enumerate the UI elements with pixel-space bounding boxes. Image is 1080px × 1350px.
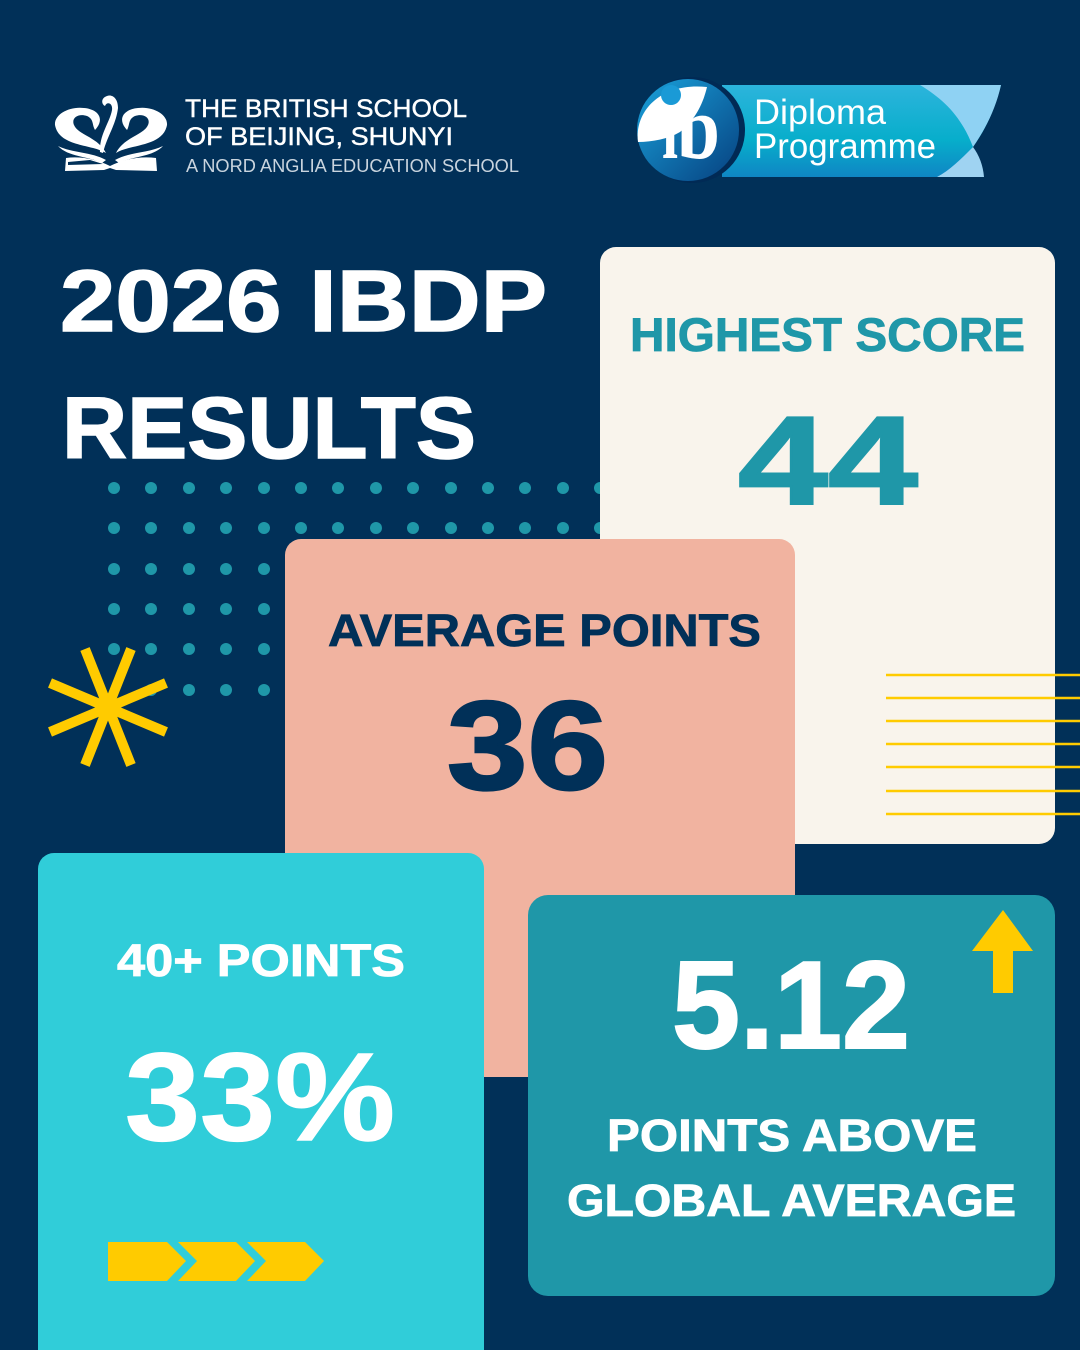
diploma label: Diploma [754,93,887,132]
school logo [55,95,519,176]
panel: 40+ points [38,853,484,1350]
yellow lines [886,675,1080,814]
i dot [661,85,681,105]
icon: crown and open book crest [55,96,167,171]
label line one: POINTS ABOVE [607,1110,977,1161]
logo ring [639,77,745,183]
title line two: RESULTS [62,380,476,477]
school name line two: OF BEIJING, SHUNYI [185,123,453,151]
logo swoosh [638,86,707,142]
icon: up arrow [972,910,1033,993]
programme label: Programme [754,127,936,166]
40+ points value: 33% [125,1028,395,1167]
card background [38,853,484,1350]
title line one: 2026 IBDP [60,253,547,350]
panel: highest score [600,247,1080,844]
average points label: AVERAGE POINTS [328,605,761,656]
highest score label: HIGHEST SCORE [630,308,1025,361]
icon: yellow chevrons [108,1242,324,1281]
school name: THE BRITISH SCHOOL [185,95,467,123]
dot pattern [108,482,606,696]
icon: yellow asterisk [50,649,166,765]
ribbon [722,85,1001,177]
logo ball [637,79,739,181]
average points value: 36 [447,675,608,816]
ribbon tail [930,147,984,177]
IB Diploma Programme logo [637,77,1001,183]
panel: average points [285,539,795,1077]
card background [285,539,795,1077]
logo letter b: b [677,79,720,178]
logo letter i: i [662,79,678,178]
value above global average: 5.12 [672,937,910,1075]
panel: points above global average [528,895,1055,1296]
ribbon highlight [920,85,1001,147]
school tagline: A NORD ANGLIA EDUCATION SCHOOL [186,156,519,176]
40+ points label: 40+ POINTS [117,935,405,986]
highest score value: 44 [738,390,918,531]
card background [600,247,1055,844]
title [60,253,547,477]
card background [528,895,1055,1296]
label line two: GLOBAL AVERAGE [567,1175,1016,1226]
